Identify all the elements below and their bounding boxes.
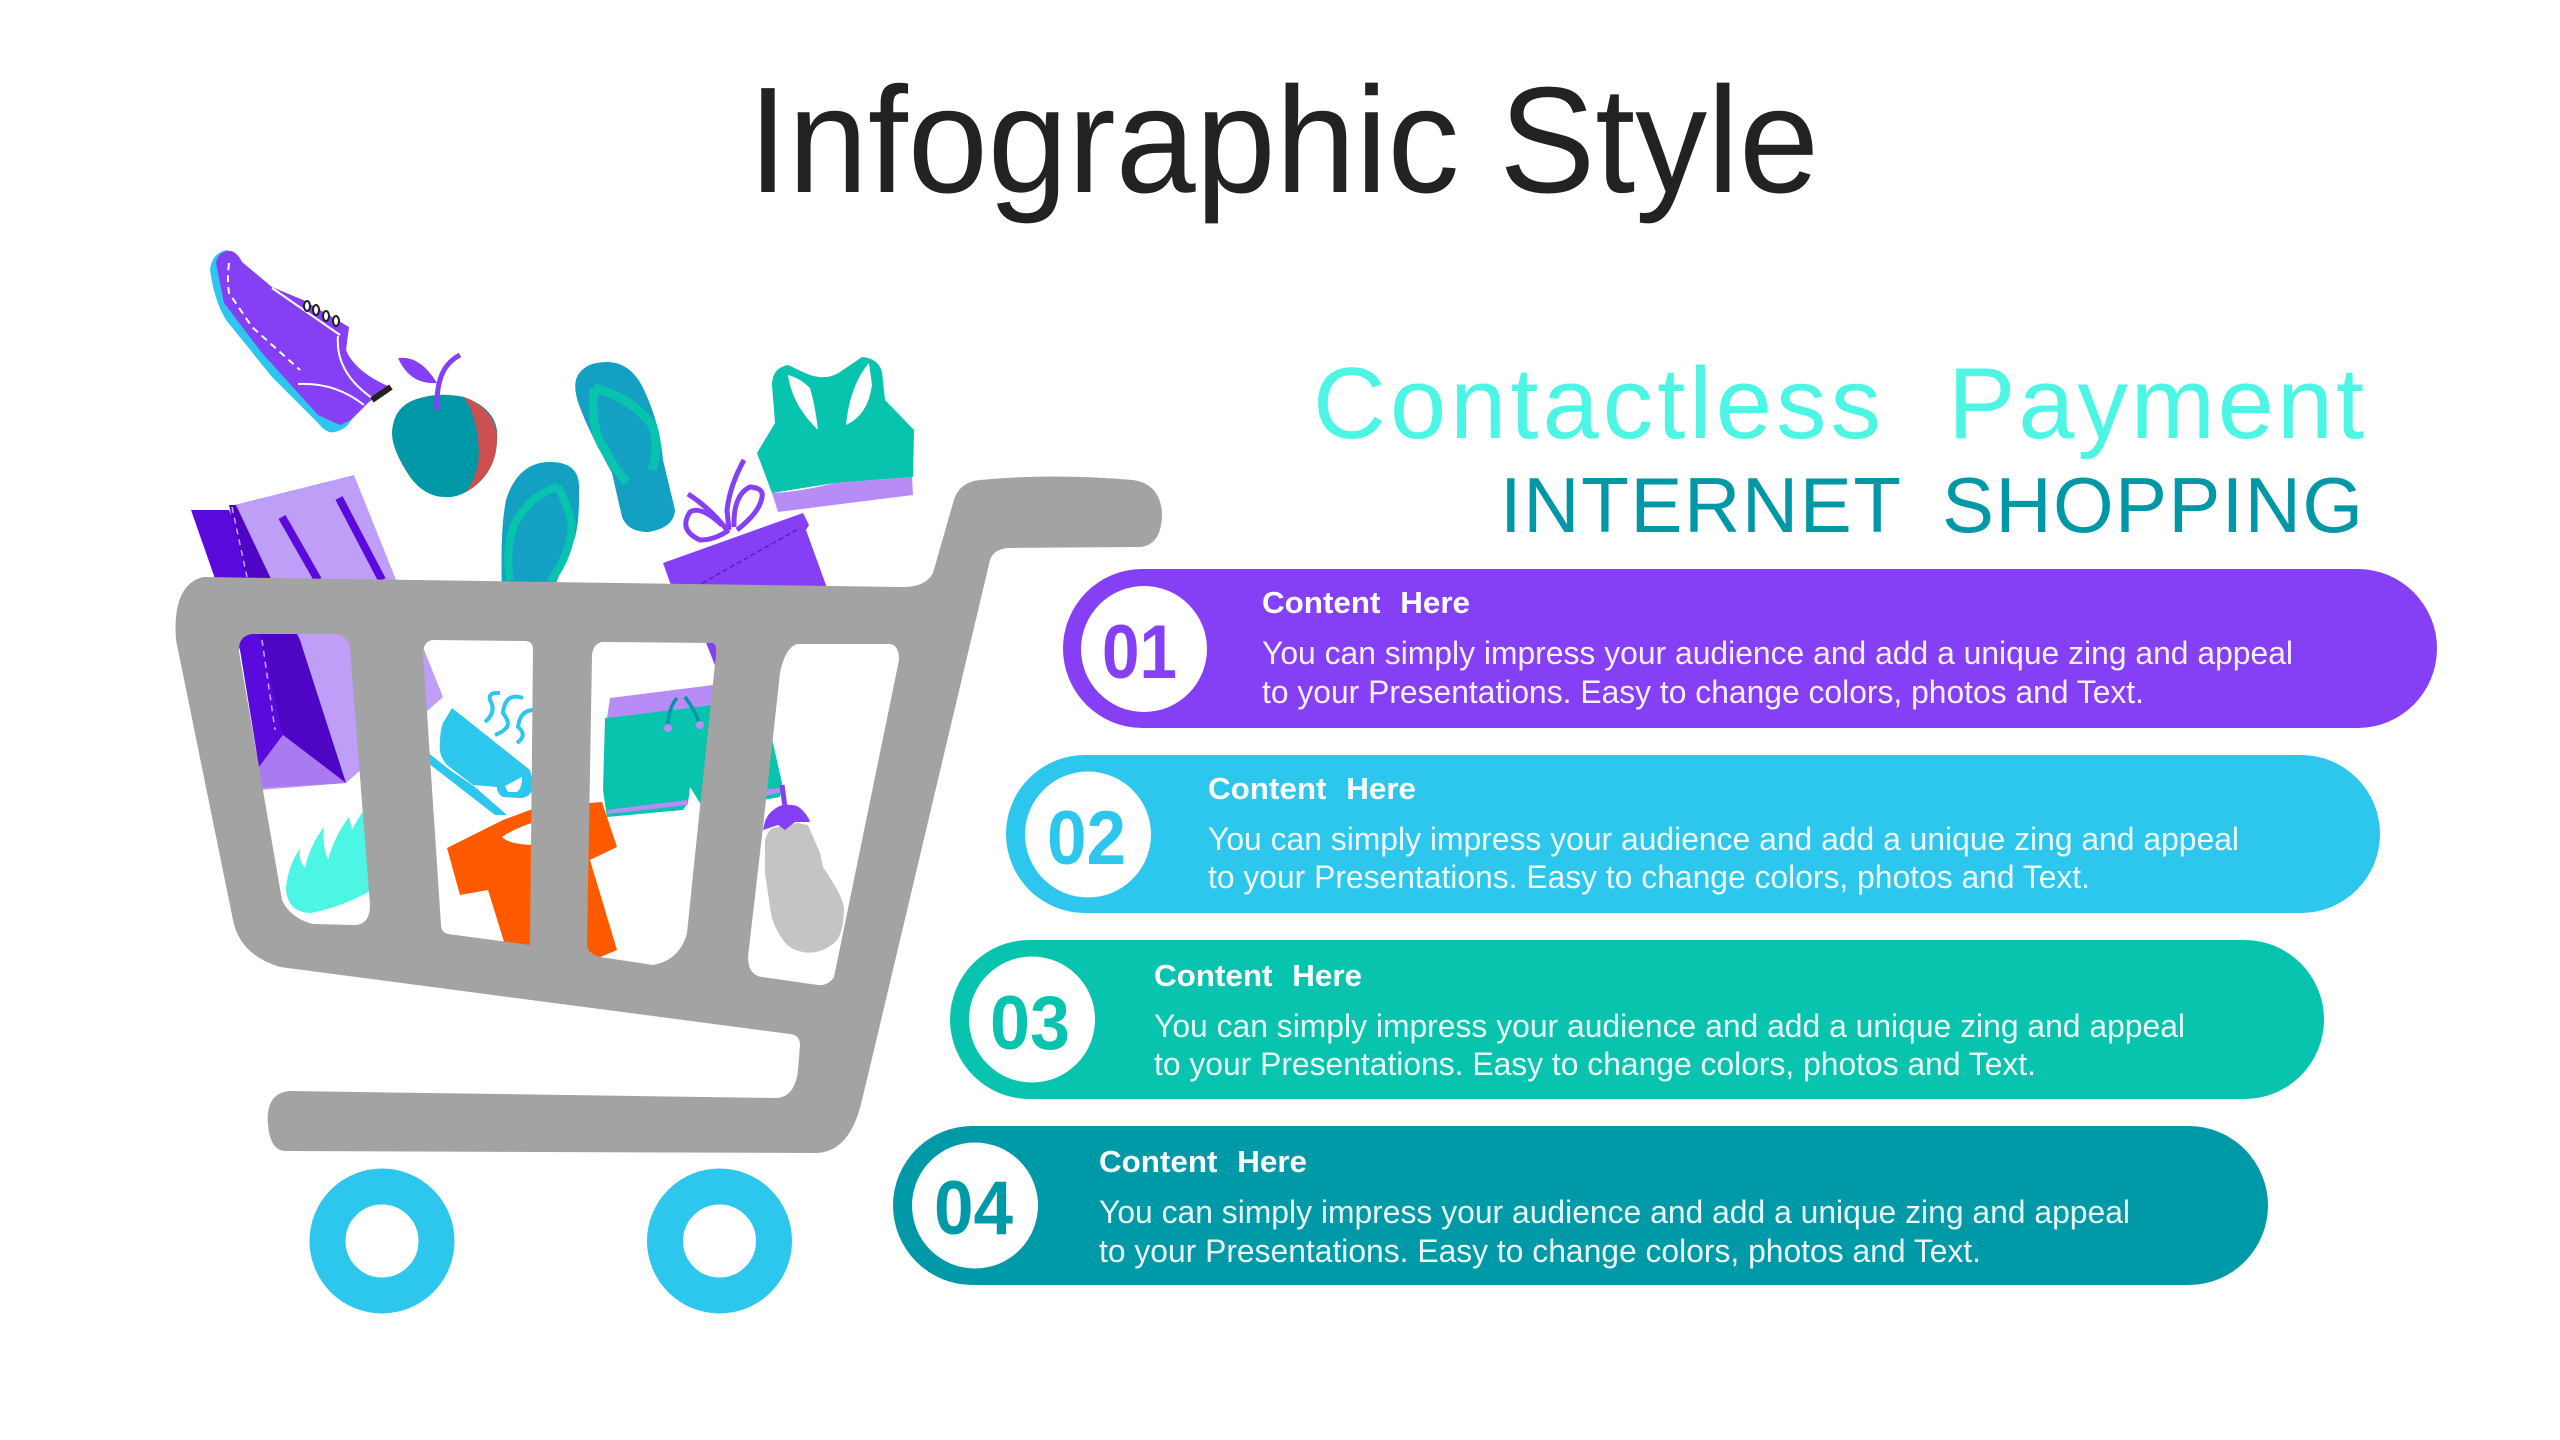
- subtitle: internet shopping: INTERNET: [1500, 461, 1901, 549]
- wheel left: [328, 1186, 436, 1296]
- panel: step 04: Content Here: [1099, 1144, 1307, 1179]
- item: t-shirt: [447, 802, 617, 958]
- wheels: [328, 1186, 774, 1296]
- item: eggplant: [763, 785, 844, 953]
- panel: step 02: Content Here: [1208, 771, 1416, 806]
- panel: step 04: [893, 1126, 2268, 1285]
- panel: step 04: 04: [934, 1166, 1013, 1251]
- panel: step 01: 01: [1102, 610, 1177, 695]
- item: sports top: [757, 357, 914, 512]
- panel: step 03: 03: [990, 981, 1070, 1066]
- panel: step 04: to your Presentations. Easy to change colors, photos and Text.: [1099, 1233, 1981, 1269]
- title: Infographic Style: [748, 55, 1819, 224]
- panel: step 02: [1006, 755, 2380, 913]
- panel: step 03: [950, 940, 2324, 1099]
- subtitle: contactless payment: [1313, 348, 2364, 460]
- item: shorts: [603, 685, 782, 817]
- item: cup: [427, 693, 534, 815]
- item: bag: [191, 475, 443, 790]
- panel: step 02: You can simply impress your audience and add a unique zing and appeal: [1208, 821, 2239, 857]
- panel: step 01: Content Here: [1262, 585, 1470, 620]
- subtitle: contactless payment: Payment: [1948, 348, 2364, 460]
- subtitle: contactless payment: Contactless: [1313, 348, 1881, 460]
- shopping cart frame: [176, 476, 1162, 1153]
- subtitle: internet shopping: [1500, 461, 2363, 549]
- item: shoe: [210, 250, 391, 432]
- item: flip flop left: [502, 462, 579, 590]
- panel: step 01: to your Presentations. Easy to change colors, photos and Text.: [1262, 674, 2144, 710]
- wheel right: [665, 1186, 774, 1296]
- panel: step 03: Content Here: [1154, 958, 1362, 993]
- panel: step 02: to your Presentations. Easy to change colors, photos and Text.: [1208, 859, 2090, 895]
- item: flip flop right: [575, 362, 675, 532]
- panel: step 03: You can simply impress your audience and add a unique zing and appeal: [1154, 1008, 2185, 1044]
- item: fur leaf: [286, 810, 372, 913]
- panel: step 01: [1063, 569, 2437, 728]
- panel: step 01: You can simply impress your audience and add a unique zing and appeal: [1262, 635, 2293, 671]
- item: gift: [663, 460, 835, 668]
- panel: step 04: You can simply impress your audience and add a unique zing and appeal: [1099, 1194, 2130, 1230]
- subtitle: internet shopping: SHOPPING: [1942, 461, 2363, 549]
- panel: step 02: 02: [1047, 796, 1126, 881]
- item: apple: [392, 355, 497, 497]
- shopping items group: [191, 250, 914, 958]
- panel: step 03: to your Presentations. Easy to change colors, photos and Text.: [1154, 1046, 2036, 1082]
